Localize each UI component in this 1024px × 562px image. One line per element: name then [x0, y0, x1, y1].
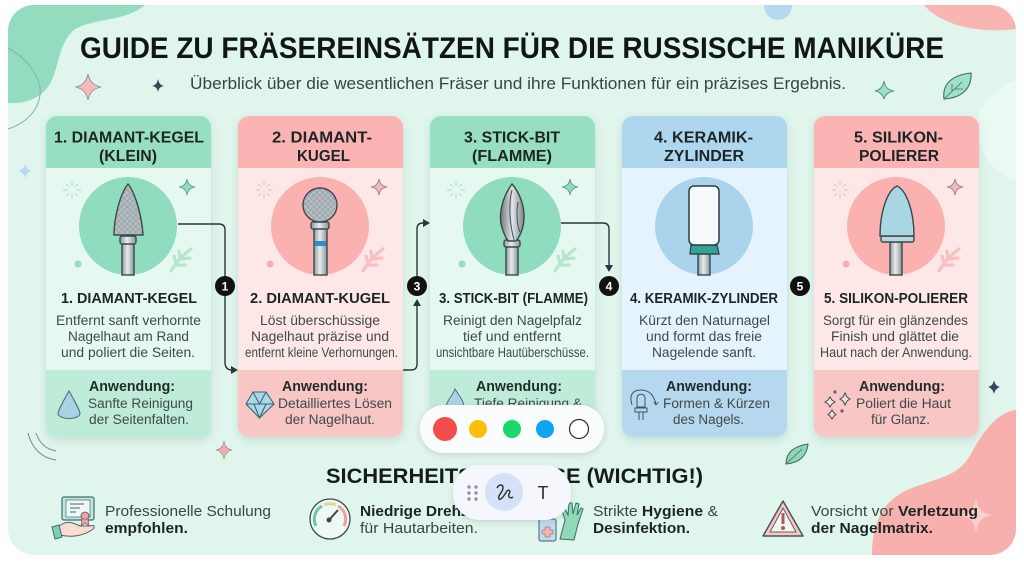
decoration: leaf top right: [944, 73, 971, 99]
card 4 name: 4. KERAMIK-ZYLINDER: [630, 290, 778, 307]
card 3 header: (FLAMME): [472, 148, 552, 165]
card 3 application: Anwendung:: [476, 379, 562, 395]
card 2 header: 2. DIAMANT-: [272, 130, 372, 146]
decoration: navy star right: [988, 380, 1000, 394]
card 5 application: Poliert die Haut: [856, 396, 951, 411]
decoration: leaf lower: [786, 444, 808, 464]
panel: card 5: [814, 116, 979, 437]
decoration: corner arcs: [28, 433, 56, 460]
decoration: navy star: [152, 79, 164, 92]
card 5 description: Haut nach der Anwendung.: [820, 345, 972, 360]
card 2 name: 2. DIAMANT-KUGEL: [250, 290, 390, 307]
icon: certificate and hand: [52, 497, 94, 539]
safety item: low speed: für Hautarbeiten.: [360, 520, 478, 537]
safety item: warning: der Nagelmatrix.: [811, 520, 933, 537]
safety item: warning: Vorsicht vor Verletzung: [811, 503, 978, 520]
card 2 application: Anwendung:: [282, 379, 368, 395]
card 4 description: Kürzt den Naturnagel: [639, 313, 770, 328]
step badge 5: 5: [797, 280, 804, 294]
card 1 application: Anwendung:: [89, 379, 175, 395]
card 4 header: 4. KERAMIK-: [654, 130, 753, 146]
card 3 application: Tiefe Reinigung &: [474, 396, 582, 411]
card 1 header: (KLEIN): [99, 148, 157, 165]
decoration: pink star lower: [216, 441, 232, 459]
step badge 1: 1: [222, 280, 229, 294]
decoration: blue star: [18, 164, 32, 178]
card 2 header: KUGEL: [297, 148, 350, 165]
card 3 illustration: [447, 177, 578, 275]
card 2 application: der Nagelhaut.: [285, 412, 375, 427]
step badge 1: [215, 276, 235, 296]
card 5 header: 5. SILIKON-: [854, 130, 943, 146]
toolbar: tools: T: [538, 483, 548, 503]
arrow: step 1 to 2: [178, 224, 238, 374]
card 4 application: [622, 370, 787, 437]
card 1 header: [46, 116, 211, 168]
card 5 description: [820, 313, 972, 360]
step badge 3: [407, 276, 427, 296]
card 3 application: [430, 370, 595, 437]
card 5 application: Anwendung:: [859, 379, 945, 395]
step badge 5: [790, 276, 810, 296]
card 1 application: Sanfte Reinigung: [88, 396, 193, 411]
card 1 description: Entfernt sanft verhornte: [56, 313, 201, 328]
sparkle: bottom right white: [962, 498, 992, 532]
icon: flame: [446, 389, 464, 412]
card 5 description: Finish und glättet die: [831, 329, 959, 344]
card 1 name: 1. DIAMANT-KEGEL: [61, 290, 197, 307]
panel: card 4: [622, 116, 787, 437]
card 4 description: Nagelende sanft.: [652, 345, 756, 360]
icon: cylinder with arrows: [631, 390, 658, 420]
safety heading: SICHERHEITSHINWEISE (WICHTIG!): [326, 465, 703, 488]
card 2 header: [238, 116, 403, 168]
card 5 application: [814, 370, 979, 437]
blob: top left green: [8, 5, 145, 103]
icon: disinfectant and glove: [539, 503, 583, 541]
card 3 description: tief und entfernt: [463, 329, 561, 344]
icon: diamond: [246, 392, 274, 418]
card 2 illustration: [255, 177, 387, 275]
card 1 application: der Seitenfalten.: [89, 412, 189, 427]
arrow: step 3 to 4: [561, 223, 613, 272]
card 2 description: [245, 313, 398, 360]
card 5 application: für Glanz.: [871, 412, 930, 427]
card 4 description: und formt das freie: [646, 329, 762, 344]
arrow: step 2 to 3: [403, 299, 421, 370]
blob: top right pink: [924, 5, 1016, 30]
card 3 header: [430, 116, 595, 168]
card 1 header: 1. DIAMANT-KEGEL: [54, 130, 204, 146]
subtitle: Überblick über die wesentlichen Fräser und ihre Funktionen für ein präzises Ergebnis.: [190, 74, 846, 93]
blob: top blue: [764, 5, 792, 20]
safety item: low speed: [310, 499, 491, 539]
card 1 description: Nagelhaut am Rand: [68, 329, 189, 344]
card 4 application: Formen & Kürzen: [663, 396, 770, 411]
card 5 name: 5. SILIKON-POLIERER: [824, 290, 968, 307]
arrow: step 3 upward: [417, 219, 430, 276]
card 2 description: entfernt kleine Verhornungen.: [245, 345, 398, 360]
card 5 illustration: [831, 177, 963, 275]
card 2 description: Nagelhaut präzise und: [251, 329, 389, 344]
card 2 application: Detailliertes Lösen: [278, 396, 392, 411]
card 3 description: unsichtbare Hautüberschüsse.: [436, 345, 589, 360]
panel: card 1: [46, 116, 211, 437]
safety item: training: empfohlen.: [105, 520, 188, 537]
panel: card 2: [238, 116, 403, 437]
title: GUIDE ZU FRÄSEREINSÄTZEN FÜR DIE RUSSISCHE MANIKÜRE: [80, 32, 944, 65]
card 1 description: [56, 313, 201, 360]
safety item: hygiene: [539, 503, 718, 541]
card 3 header: 3. STICK-BIT: [464, 130, 560, 146]
decoration: green star: [875, 81, 894, 99]
safety item: warning: [763, 501, 978, 537]
card 4 description: [639, 313, 770, 360]
card 4 header: ZYLINDER: [664, 148, 744, 165]
toolbar: colour picker: [420, 405, 604, 453]
card 2 description: Löst überschüssige: [260, 313, 380, 328]
card 4 illustration: [655, 177, 753, 275]
decoration: pink star: [76, 74, 101, 100]
card 1 illustration: [63, 177, 195, 275]
card 1 description: und poliert die Seiten.: [61, 345, 195, 360]
card 5 header: [814, 116, 979, 168]
safety item: hygiene: Desinfektion.: [593, 520, 690, 537]
card 2 application: [238, 370, 403, 437]
card 3 description: [436, 313, 589, 360]
icon: cone: [58, 391, 80, 418]
safety item: training: [52, 497, 271, 539]
blob: bottom right pink: [872, 410, 1016, 555]
icon: sparkles: [825, 390, 850, 419]
card 1 application: [46, 370, 211, 437]
safety item: hygiene: Strikte Hygiene &: [593, 503, 718, 520]
step badge 4: [599, 276, 619, 296]
toolbar: tools: [453, 465, 571, 520]
panel: card 3: [430, 116, 595, 437]
safety item: low speed: Niedrige Drehzahl: [360, 503, 491, 520]
icon: warning triangle: [763, 501, 803, 536]
step badge 4: 4: [606, 280, 613, 294]
safety item: training: Professionelle Schulung: [105, 503, 271, 520]
blob: right light: [977, 80, 1016, 180]
card 4 header: [622, 116, 787, 168]
icon: gauge: [310, 499, 350, 539]
step badge 3: 3: [414, 280, 421, 294]
card 4 application: des Nagels.: [673, 412, 744, 427]
card 5 description: Sorgt für ein glänzendes: [823, 313, 968, 328]
card 5 header: POLIERER: [859, 148, 939, 165]
card 4 application: Anwendung:: [666, 379, 752, 395]
card 3 description: Reinigt den Nagelpfalz: [443, 313, 582, 328]
card 3 name: 3. STICK-BIT (FLAMME): [439, 290, 588, 307]
